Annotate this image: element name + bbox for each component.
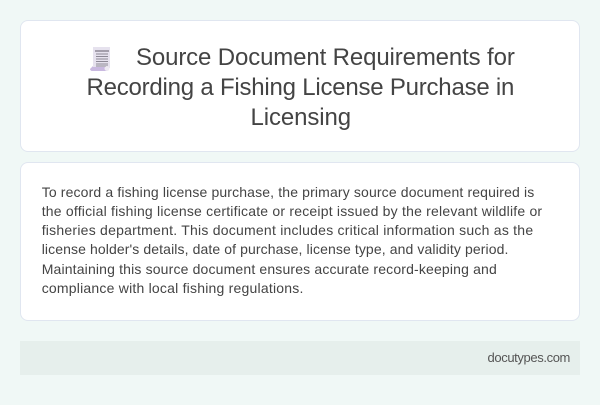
text block: description: license holder's details, date of purchase, license type, and validity period.	[42, 241, 509, 257]
text block: description: Maintaining this source document ensures accurate record-keeping and	[42, 261, 497, 277]
footer: site name: docutypes.com	[488, 350, 570, 365]
heading: title: Recording a Fishing License Purchase in	[86, 74, 514, 101]
heading: title: Source Document Requirements for	[136, 44, 515, 71]
panel: description card	[20, 162, 580, 321]
text block: description: compliance with local fishing regulations.	[42, 280, 304, 296]
heading: title: Licensing	[250, 104, 351, 131]
heading: title	[86, 44, 515, 131]
icon: document receipt	[90, 47, 110, 71]
panel: title card	[20, 20, 580, 152]
text block: description: the official fishing license certificate or receipt issued by the relevant wildlife or	[42, 203, 542, 219]
text block: description: fisheries department. This document includes critical information such as the	[42, 222, 533, 238]
text block: description	[42, 184, 542, 296]
footer bar	[20, 341, 580, 375]
text block: description: To record a fishing license purchase, the primary source document required is	[42, 184, 534, 200]
